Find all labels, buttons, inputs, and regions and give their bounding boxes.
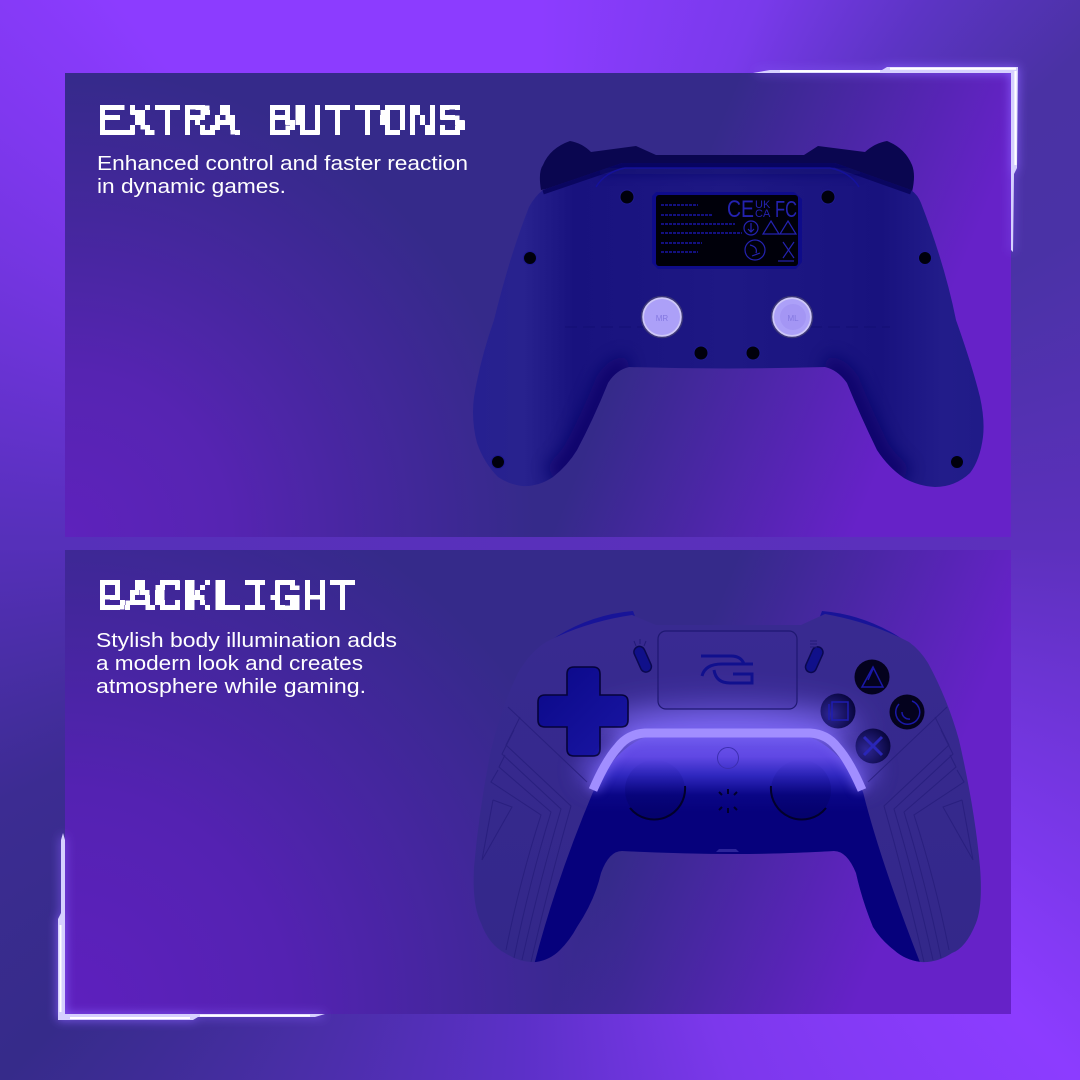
button: MR bbox=[642, 296, 682, 338]
heading: extra buttons: EXTRA BUTTONS bbox=[97, 97, 465, 148]
text block: backlight description: a modern look and creates bbox=[96, 652, 363, 675]
text block: extra buttons description: in dynamic games. bbox=[97, 175, 286, 198]
pill buttons bbox=[632, 645, 825, 674]
analog sticks bbox=[625, 760, 831, 820]
gap band between panels bbox=[0, 537, 1080, 550]
top rim bbox=[596, 168, 859, 187]
dark centre wedge bbox=[534, 735, 921, 965]
body bbox=[474, 614, 981, 962]
touchpad bbox=[658, 631, 797, 709]
controller rear view bbox=[473, 141, 984, 487]
light bar bbox=[593, 733, 862, 790]
text block: backlight description: Stylish body illumination adds bbox=[96, 629, 397, 652]
notch bbox=[716, 849, 739, 852]
button: MR: MR bbox=[656, 314, 668, 323]
CE UKCA FCC marks: FC bbox=[775, 196, 797, 222]
CE UKCA FCC marks: UK bbox=[755, 199, 771, 211]
CE UKCA FCC marks: CE bbox=[727, 196, 754, 223]
d-pad bbox=[538, 667, 628, 756]
parting line bbox=[565, 326, 890, 328]
logo bbox=[701, 656, 753, 683]
backlight glow on upper body bbox=[598, 706, 858, 754]
screw holes bbox=[492, 190, 964, 468]
CE UKCA FCC marks bbox=[727, 196, 797, 223]
frame: bottom left neon corner bbox=[58, 833, 325, 1020]
panel: backlight bbox=[65, 550, 1011, 1014]
triggers bbox=[540, 141, 914, 192]
frame: top right neon corner bbox=[753, 67, 1018, 252]
speaker dots bbox=[719, 789, 737, 813]
grip texture bbox=[482, 707, 973, 962]
body bbox=[473, 163, 984, 487]
recycling and safety symbols bbox=[744, 221, 796, 261]
text block: backlight description bbox=[96, 629, 397, 698]
button: ML bbox=[772, 296, 812, 338]
CE UKCA FCC marks: CA bbox=[755, 208, 771, 220]
face buttons bbox=[820, 660, 924, 764]
grip shading bbox=[543, 165, 911, 478]
panel: extra buttons bbox=[65, 73, 1011, 537]
compliance label bbox=[652, 192, 802, 269]
text block: extra buttons description: Enhanced control and faster reaction bbox=[97, 152, 468, 175]
heading: backlight: BACKLIGHT bbox=[96, 574, 358, 625]
button: ML: ML bbox=[787, 314, 799, 323]
text block: backlight description: atmosphere while gaming. bbox=[96, 675, 366, 698]
controller front view bbox=[474, 611, 981, 965]
shoulder buttons bbox=[544, 611, 636, 648]
text block: extra buttons description bbox=[97, 152, 468, 198]
home button bbox=[718, 748, 738, 768]
